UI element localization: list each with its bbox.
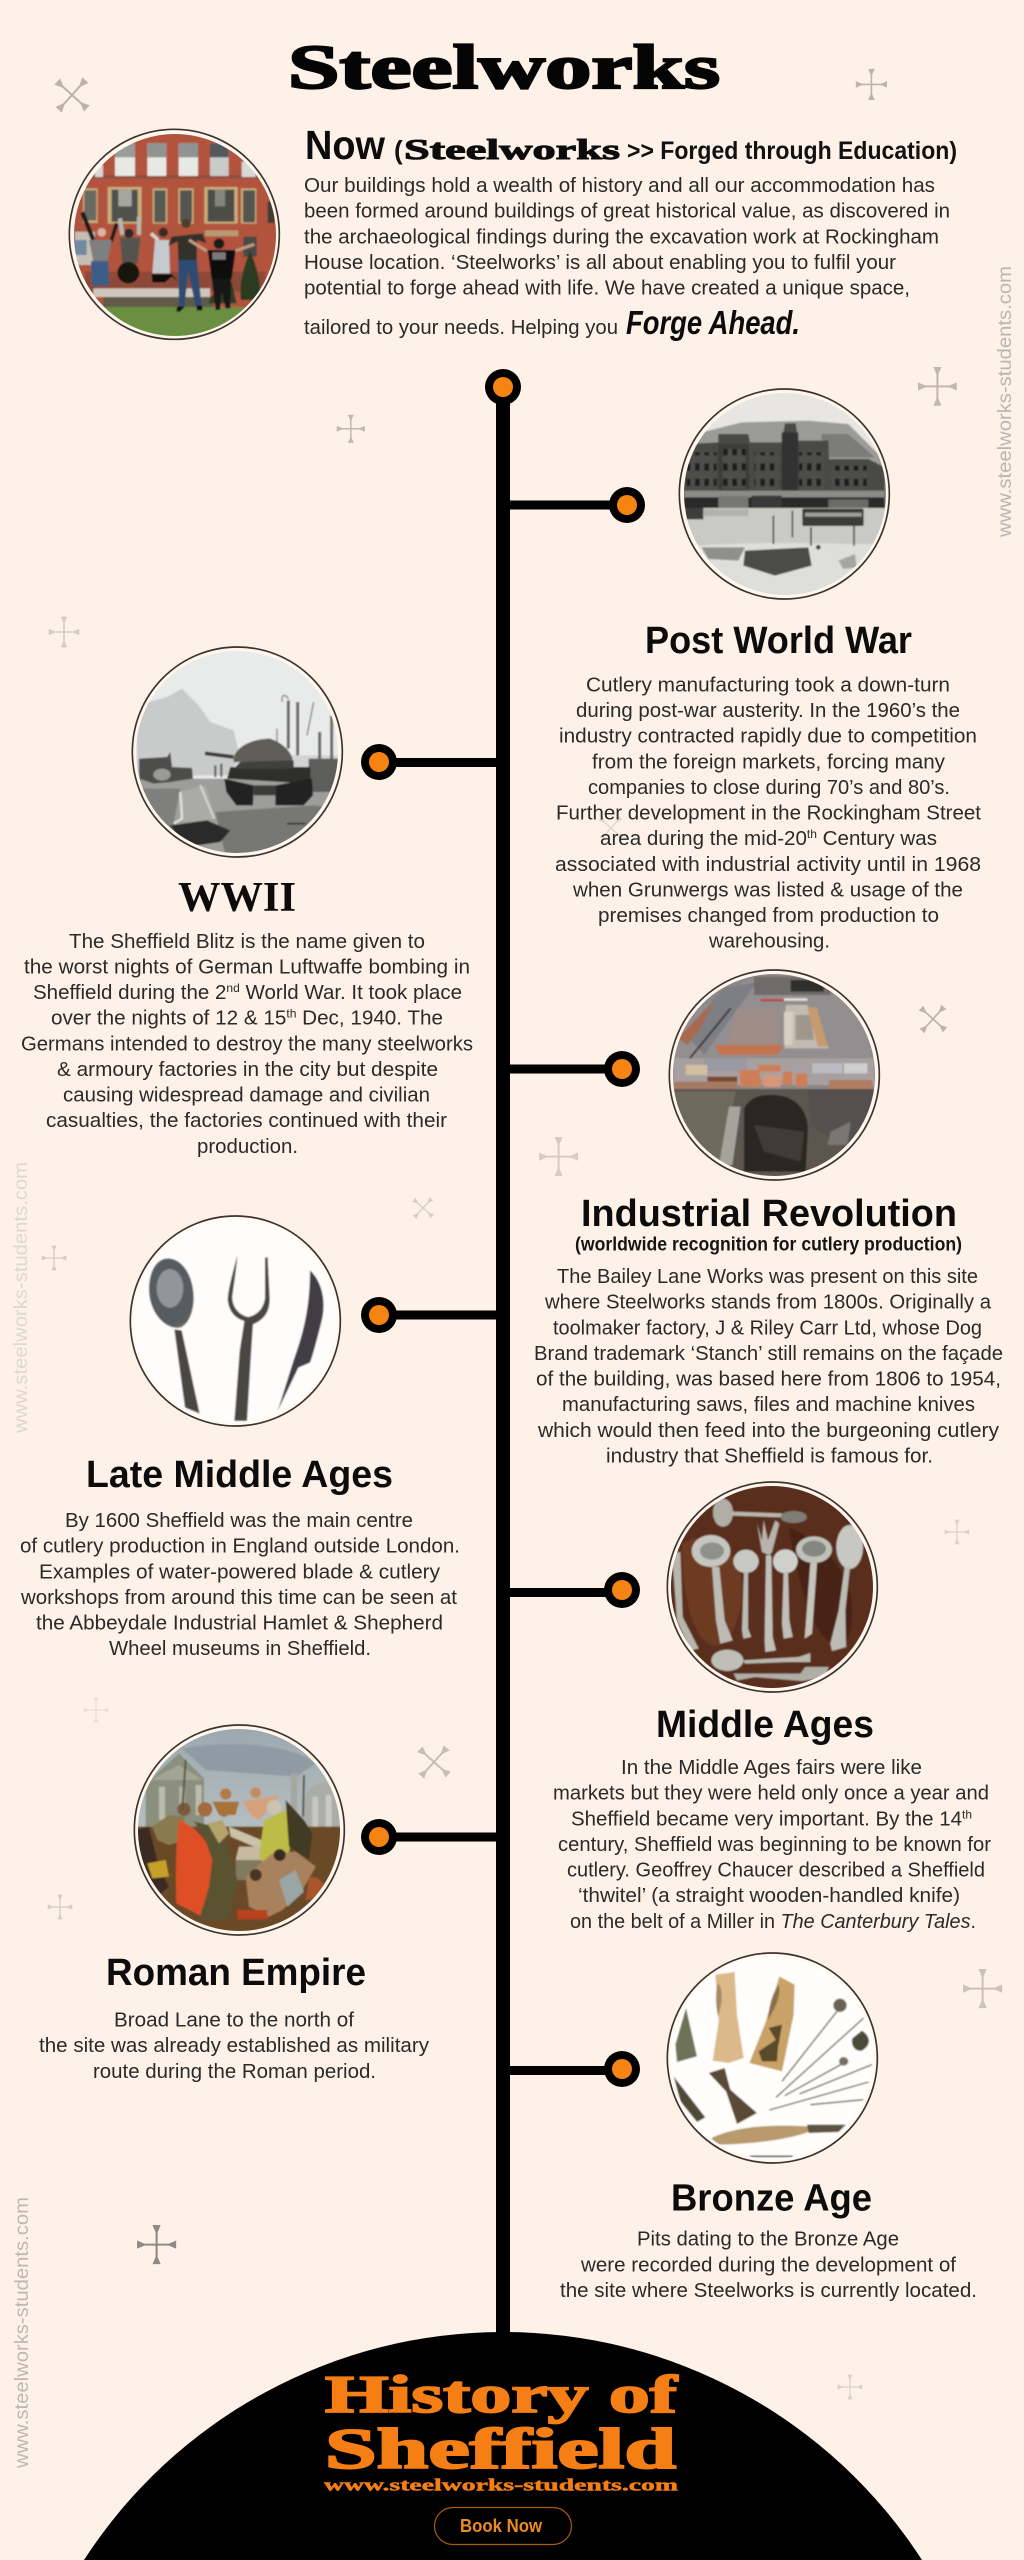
text: middle ages body: ‘thwitel’ (a straight wooden-handled knife) (578, 1884, 960, 1907)
photo: silver spoons on wood (662, 1477, 882, 1697)
connector: wwii (361, 744, 496, 780)
text: wwii body: nd (226, 981, 240, 995)
text: now heading: Now (305, 122, 385, 168)
text: now body: the archaeological findings during the excavation work at Rockingham (304, 225, 939, 248)
text: late middle ages body: By 1600 Sheffield was the main centre (65, 1509, 413, 1532)
connector: industrial revolution (510, 1051, 640, 1087)
text: post world war body: associated with industrial activity until in 1968 (555, 853, 981, 876)
text: post world war body: when Grunwergs was listed & usage of the (572, 878, 963, 901)
photo: brick excavation with arch (664, 965, 884, 1186)
watermark: left middle: www.steelworks-students.com (11, 1162, 32, 1434)
footer title (325, 2366, 679, 2481)
icon: cross x top left (44, 67, 100, 123)
text: post world war body: warehousing. (708, 930, 830, 953)
icon: cross right (918, 367, 957, 406)
text: late middle ages body (20, 1509, 460, 1660)
text: industrial revolution body: which would then feed into the burgeoning cutlery (537, 1419, 1000, 1442)
heading: middle ages: Middle Ages (656, 1704, 874, 1746)
watermark: right: www.steelworks-students.com (995, 266, 1016, 538)
text: middle ages body (553, 1756, 991, 1933)
text: middle ages body: th (962, 1807, 972, 1821)
text: bronze age body: were recorded during the development of (580, 2253, 956, 2276)
text: wwii body: World War. It took place (240, 981, 462, 1004)
icon: cross x lower (407, 1735, 461, 1789)
photo: students jumping in front of brick building (65, 125, 285, 352)
text: wwii body: production. (197, 1135, 298, 1158)
button: book now: Book Now (460, 2516, 543, 2536)
icon: cross dark (137, 2225, 176, 2264)
text: post world war body (555, 673, 981, 953)
text: post world war body: premises changed from production to (598, 904, 939, 927)
icon: cross pale left lower (84, 1698, 108, 1722)
text: post world war body: during post-war austerity. In the 1960’s the (576, 699, 960, 722)
text: industrial revolution body: Brand trademark ‘Stanch’ still remains on the façade (534, 1342, 1003, 1365)
text: wwii body: & armoury factories in the city but despite (57, 1058, 438, 1081)
text: late middle ages body: workshops from around this time can be seen at (20, 1586, 457, 1609)
text: now body: been formed around buildings of great historical value, as discovered in (304, 200, 950, 223)
text: now body: House location. ‘Steelworks’ is all about enabling you to fulfil your (304, 251, 896, 274)
text: now heading: ( (394, 135, 403, 165)
icon: cross pale left bottom (48, 1895, 72, 1919)
text: industrial revolution body: where Steelworks stands from 1800s. Originally a (544, 1291, 992, 1314)
text: roman empire body: the site was already established as military (39, 2034, 430, 2057)
text: now body: Forge Ahead. (626, 304, 800, 341)
text: bronze age body (560, 2228, 977, 2302)
text: industrial revolution body (534, 1265, 1003, 1467)
text: wwii body: th (286, 1007, 296, 1021)
connector: bronze age (510, 2051, 640, 2087)
text: middle ages body: century, Sheffield was beginning to be known for (558, 1833, 991, 1856)
icon: cross right bottom (963, 1969, 1002, 2008)
watermark: left bottom: www.steelworks-students.com (12, 2197, 33, 2469)
icon: cross x small (406, 1191, 440, 1225)
text: late middle ages body: the Abbeydale Industrial Hamlet & Shepherd (36, 1612, 443, 1634)
title: Steelworks (288, 34, 720, 102)
text: wwii body: causing widespread damage and civilian (63, 1084, 430, 1106)
text: post world war body: companies to close during 70’s and 80’s. (588, 776, 950, 799)
text: middle ages body: In the Middle Ages fairs were like (621, 1756, 922, 1779)
text: post world war body: Further development in the Rockingham Street (556, 802, 981, 824)
timeline spine (485, 369, 521, 2337)
connector: late middle ages (361, 1297, 496, 1333)
photo: roman painting (129, 1720, 349, 1940)
text: post world war body: industry contracted rapidly due to competition (559, 725, 977, 748)
footer title: Sheffield (325, 2418, 676, 2481)
text: wwii body (21, 930, 473, 1158)
text: bronze age body: Pits dating to the Bronze Age (637, 2228, 899, 2251)
photo: tank in a ruined street (127, 642, 347, 862)
photo: spoon fork and knife (125, 1211, 345, 1431)
connector: post world war (510, 487, 645, 523)
text: now body: Our buildings hold a wealth of history and all our accommodation has (304, 174, 935, 197)
heading: wwii: WWII (178, 875, 296, 921)
text: industrial revolution body: toolmaker factory, J & Riley Carr Ltd, whose Dog (553, 1316, 982, 1339)
icon: cross right pale (945, 1520, 969, 1544)
text: post world war body: area during the mid-20 (600, 827, 806, 850)
text: wwii body: Sheffield during the 2 (33, 981, 226, 1004)
text: middle ages body: markets but they were held only once a year and (553, 1782, 989, 1805)
icon: cross middle (337, 415, 365, 443)
footer dome (84, 2332, 922, 2560)
text: post world war body: th (807, 827, 817, 841)
text: now body: tailored to your needs. Helping you (304, 316, 618, 339)
footer title: History of (325, 2366, 679, 2424)
text: now heading (305, 122, 957, 168)
text: industrial revolution body: of the building, was based here from 1806 to 1954, (536, 1368, 1001, 1390)
icon: cross left pale (42, 1246, 66, 1270)
text: post world war body: Cutlery manufacturing took a down-turn (586, 673, 950, 696)
subheading: industrial revolution: (worldwide recognition for cutlery production) (575, 1234, 962, 1256)
text: roman empire body: Broad Lane to the north of (114, 2008, 354, 2032)
text: late middle ages body: Examples of water-powered blade & cutlery (39, 1560, 441, 1583)
text: post world war body: Century was (817, 827, 937, 850)
heading: late middle ages: Late Middle Ages (86, 1454, 393, 1496)
text: industrial revolution body: The Bailey Lane Works was present on this site (557, 1265, 978, 1288)
text: middle ages body: Sheffield became very important. By the 14 (571, 1807, 963, 1830)
heading: bronze age: Bronze Age (671, 2178, 872, 2220)
connector: roman empire (361, 1819, 496, 1855)
text: wwii body: Dec, 1940. The (296, 1007, 443, 1030)
text: industrial revolution body: industry that Sheffield is famous for. (606, 1444, 933, 1467)
icon: cross right of centre (539, 1137, 578, 1176)
text: wwii body: over the nights of 12 & 15 (51, 1007, 285, 1030)
icon: cross x behind text (591, 808, 631, 848)
icon: cross top right (856, 69, 887, 100)
text: late middle ages body: of cutlery production in England outside London. (20, 1535, 460, 1558)
icon: cross left (49, 617, 79, 647)
photo: bronze age axes and pins (662, 1948, 882, 2168)
text: roman empire body (39, 2008, 430, 2083)
text: wwii body: the worst nights of German Luftwaffe bombing in (24, 955, 470, 978)
connector: middle ages (510, 1572, 640, 1608)
text: bronze age body: the site where Steelworks is currently located. (560, 2279, 977, 2302)
footer url: www.steelworks-students.com (324, 2476, 678, 2495)
text: now heading: >> Forged through Education) (627, 137, 957, 165)
photo: post-war street scene (675, 384, 895, 604)
icon: cross x right (910, 996, 956, 1042)
text: middle ages body: on the belt of a Miller in The Canterbury Tales. (570, 1910, 976, 1933)
icon: cross pale near dome (838, 2375, 862, 2399)
heading: industrial revolution: Industrial Revolution (581, 1193, 957, 1235)
text: wwii body: Germans intended to destroy the many steelworks (21, 1032, 473, 1055)
text: wwii body: The Sheffield Blitz is the name given to (69, 930, 425, 953)
text: wwii body: casualties, the factories continued with their (46, 1109, 447, 1132)
text: industrial revolution body: manufacturing saws, files and machine knives (562, 1393, 975, 1416)
text: roman empire body: route during the Roman period. (93, 2060, 376, 2083)
text: now body: potential to forge ahead with life. We have created a unique space, (304, 277, 910, 300)
heading: post world war: Post World War (645, 620, 912, 662)
text: post world war body: from the foreign markets, forcing many (592, 750, 946, 773)
text: now heading: Steelworks (404, 134, 620, 166)
text: late middle ages body: Wheel museums in Sheffield. (109, 1637, 371, 1660)
button: book now (434, 2508, 572, 2544)
heading: roman empire: Roman Empire (106, 1952, 366, 1994)
text: now body (304, 174, 950, 341)
text: middle ages body: cutlery. Geoffrey Chaucer described a Sheffield (567, 1858, 985, 1882)
